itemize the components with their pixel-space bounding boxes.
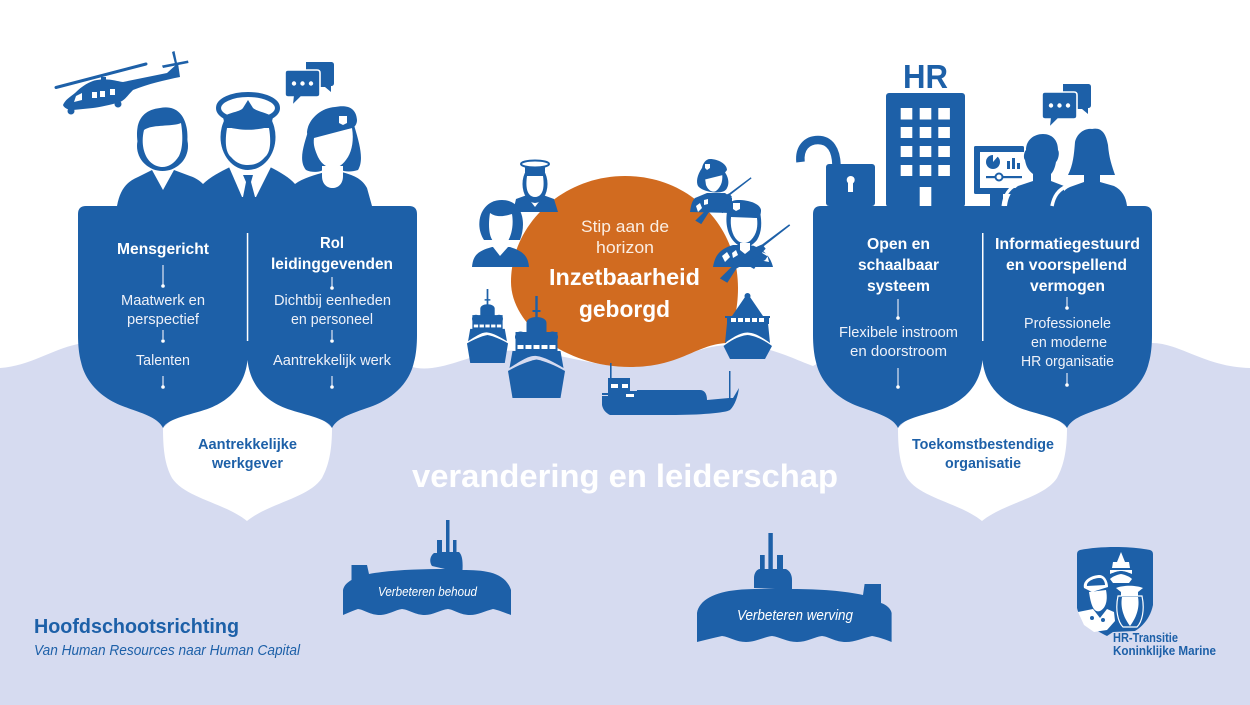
icon: speech bubbles right [1042,84,1091,128]
logo: HR-Transitie shield [1077,547,1216,658]
central orange sphere: geborgd [579,296,670,322]
text: Maatwerk en perspectief [121,293,205,328]
icon: inland tanker [602,363,739,415]
central orange sphere [511,176,738,367]
right white shield: Toekomstbestendige organisatie: Toekomstbestendige [912,437,1054,453]
icon: frigate small [467,289,508,363]
text: Talenten: Talenten [136,353,190,369]
right blue panel [813,206,1152,428]
text: HR: HR [903,58,948,95]
left white shield: Aantrekkelijke werkgever: Aantrekkelijke [198,437,297,453]
heading: Rol leidinggevenden: Rol [320,235,344,252]
text: Professionele en moderne HR organisatie: Professionele [1024,316,1111,332]
text: Aantrekkelijk werk: Aantrekkelijk werk [273,353,392,369]
right white shield: Toekomstbestendige organisatie [898,350,1067,521]
logo sailor [1078,575,1115,632]
heading: Open en schaalbaar systeem: systeem [867,278,930,295]
connector [330,277,334,290]
heading: Open en schaalbaar systeem: Open en [867,236,930,253]
left white shield: Aantrekkelijke werkgever: werkgever [211,456,283,472]
icon: open padlock [800,140,875,206]
heading: Informatiegestuurd en voorspellend vermogen [995,236,1140,295]
connector [161,376,165,389]
icon: sailor [513,160,558,212]
text: Flexibele instroom en doorstroom [839,325,958,360]
logo: HR-Transitie shield: Koninklijke Marine [1113,644,1216,658]
connector [161,330,165,343]
submarine: Verbeteren werving [697,533,892,642]
text: Stip aan de horizon: Stip aan de [581,217,669,236]
text: Professionele en moderne HR organisatie: en moderne [1031,335,1107,351]
text: Dichtbij eenheden en personeel: Dichtbij eenheden [274,293,391,309]
text: Dichtbij eenheden en personeel [274,293,391,328]
logo text: HR-Transitie [1113,631,1178,645]
text: Maatwerk en perspectief: perspectief [127,312,200,328]
icon: civilian man [117,107,203,206]
icon: female soldier with beret [295,106,372,206]
icon: soldier upper [690,159,757,229]
text: Flexibele instroom en doorstroom: en doorstroom [850,344,947,360]
submarine: Verbeteren behoud: Verbeteren behoud [378,584,478,599]
connector [330,330,334,343]
connector [896,368,900,389]
connector [1065,297,1069,310]
icon: helicopter [56,51,188,114]
heading: Informatiegestuurd en voorspellend vermogen: vermogen [1030,278,1105,295]
icon: navy officer [203,94,295,206]
heading: Rol leidinggevenden: leidinggevenden [271,256,393,273]
text: Professionele en moderne HR organisatie [1021,316,1114,370]
icon: frigate right [724,293,772,359]
icon: speech bubbles left [285,62,334,106]
submarine: Verbeteren behoud [343,520,511,615]
text: Dichtbij eenheden en personeel: en personeel [291,312,373,328]
submarine: Verbeteren werving: Verbeteren werving [737,607,854,624]
logo ship [1110,552,1132,583]
text: Flexibele instroom en doorstroom: Flexibele instroom [839,325,958,341]
icon: person silhouettes [1003,129,1127,206]
connector [1065,373,1069,387]
logo officer [1116,586,1143,627]
text: Maatwerk en perspectief: Maatwerk en [121,293,205,309]
background: sea wave [0,325,1250,705]
left blue panel [78,206,417,428]
central orange sphere: horizon [596,238,654,257]
heading: Informatiegestuurd en voorspellend vermogen: en voorspellend [1006,257,1127,274]
icon: frigate large [508,296,565,398]
left white shield: Aantrekkelijke werkgever [163,350,332,521]
connector [896,299,900,320]
icon: monitor with charts [974,146,1024,206]
heading: Open en schaalbaar systeem: schaalbaar [858,257,939,274]
heading: verandering en leiderschap: verandering en leiderschap [412,458,838,494]
connector [161,265,165,288]
icon: HR building [886,58,965,207]
footer title: Hoofdschootsrichting: Hoofdschootsrichting [34,616,239,638]
heading: Mensgericht: Mensgericht [117,241,209,258]
heading: Rol leidinggevenden [271,235,393,273]
footer subtitle: Van Human Resources naar Human Capital [34,642,301,659]
heading: Open en schaalbaar systeem [858,236,939,295]
heading: Informatiegestuurd en voorspellend vermogen: Informatiegestuurd [995,236,1140,253]
connector [330,376,334,389]
text: Inzetbaarheid geborgd: Inzetbaarheid [549,264,700,290]
icon: soldier lower [713,200,798,289]
icon: woman [472,200,529,267]
right white shield: Toekomstbestendige organisatie: organisatie [945,456,1021,472]
text: Professionele en moderne HR organisatie: HR organisatie [1021,354,1114,370]
